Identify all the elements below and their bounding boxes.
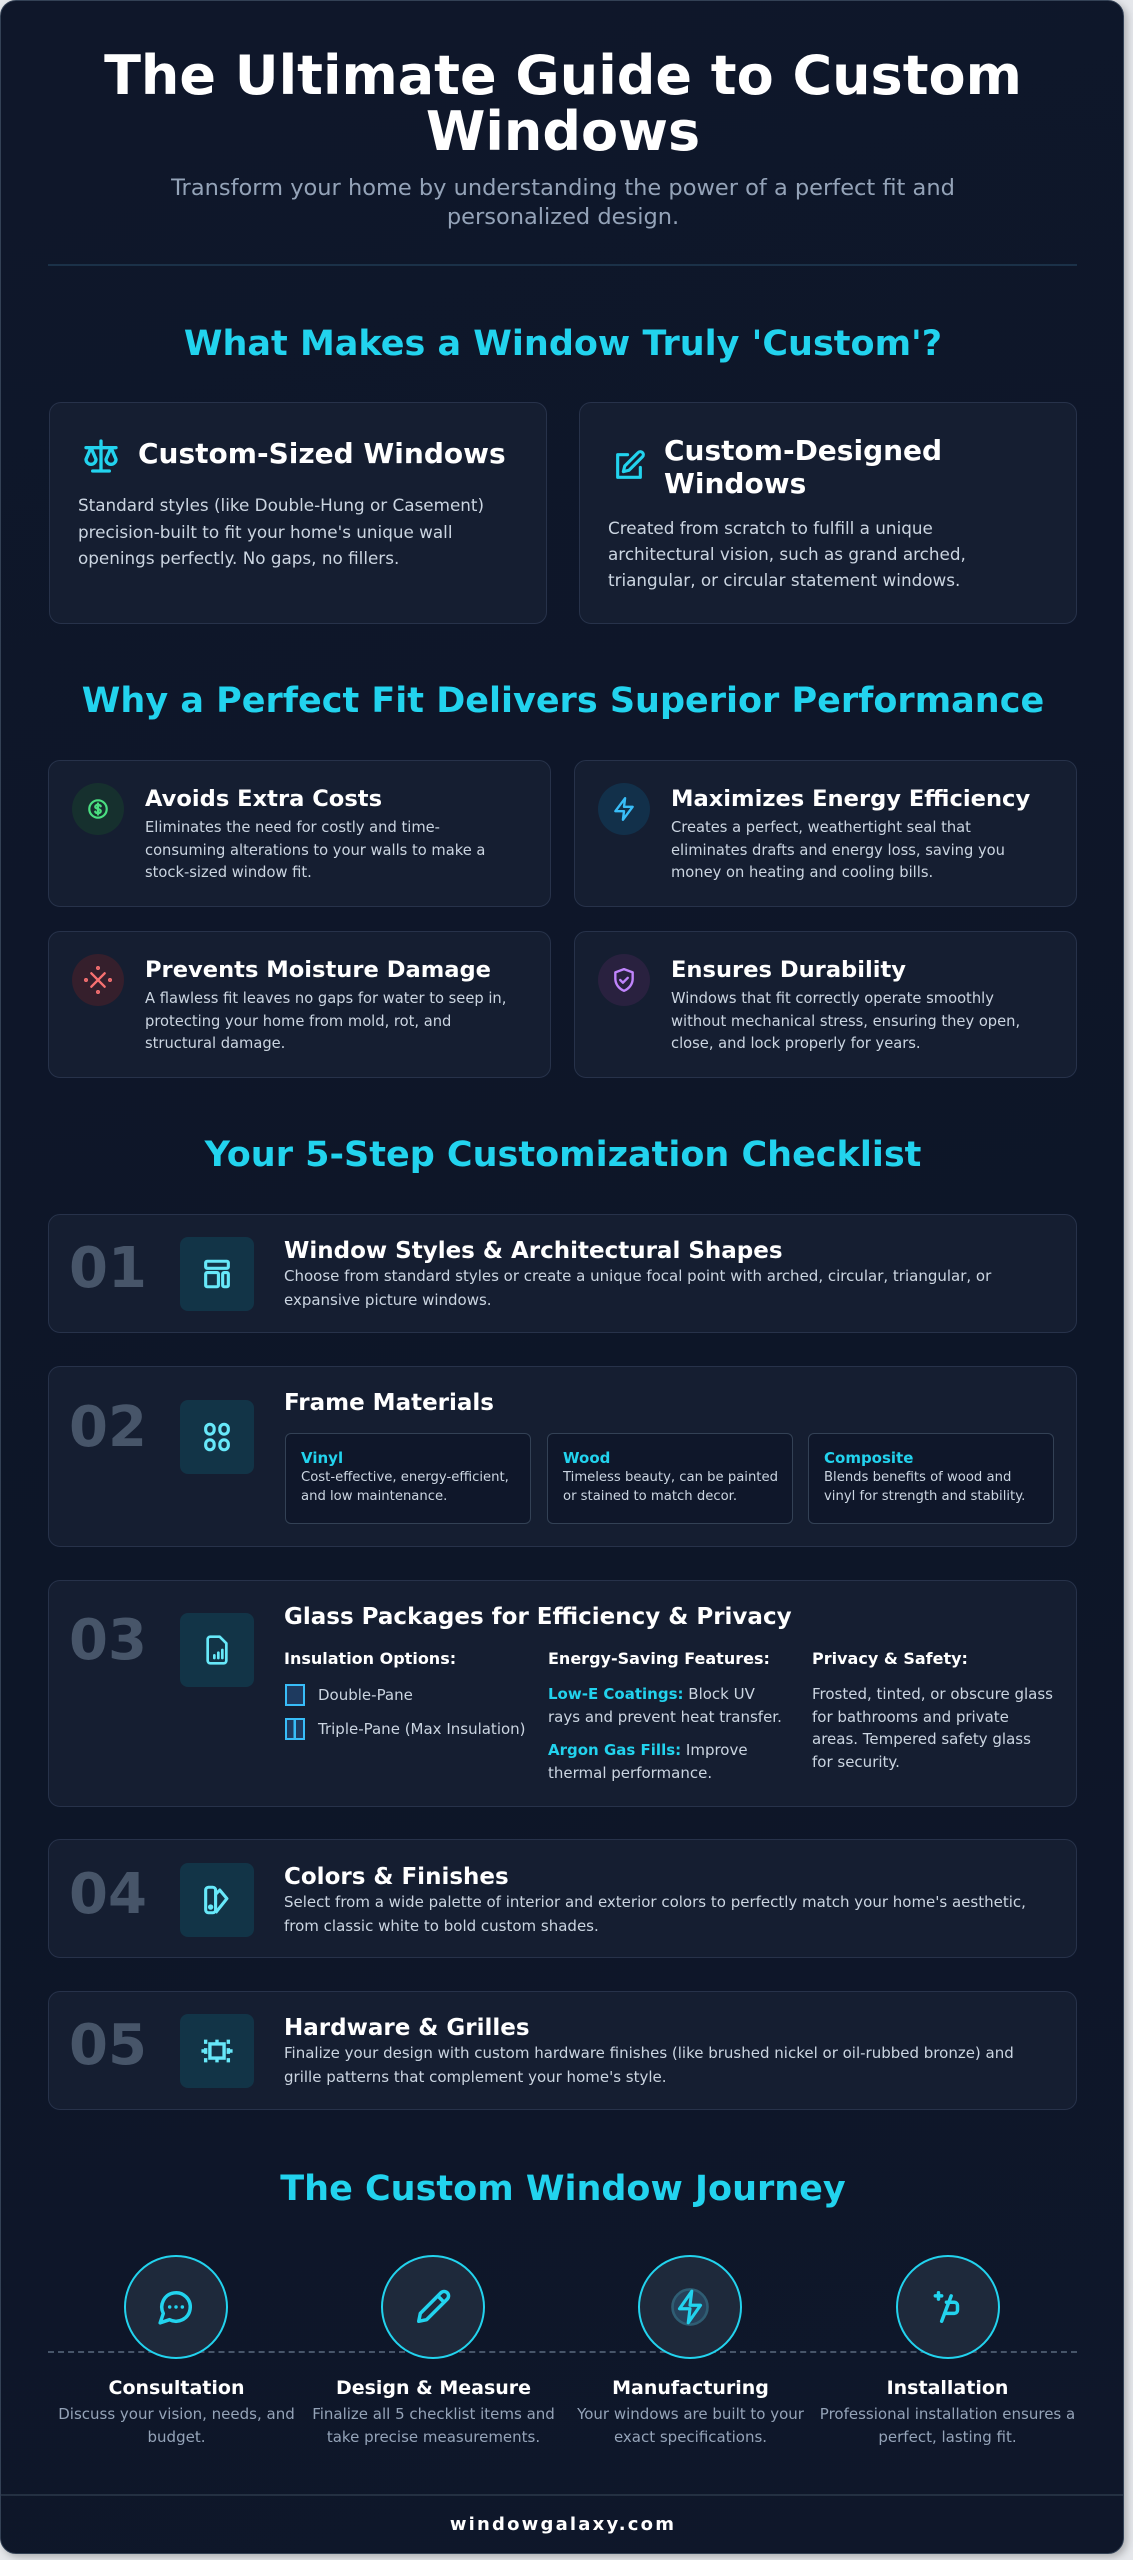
panel: energy efficiency: eliminates drafts and energy loss, saving you — [671, 842, 1005, 858]
card body — [608, 518, 966, 590]
text: expansive picture windows. — [284, 1290, 492, 1308]
text: Finalize your design with custom hardware finishes (like brushed nickel or oil-rubbed bronze) and — [284, 2044, 1014, 2062]
panel: avoids extra costs: stock-sized window fit. — [145, 864, 312, 881]
panel: durability: without mechanical stress, ensuring they open, — [671, 1012, 1020, 1030]
panel: step 01 — [48, 1214, 1077, 1333]
text: Hardware & Grilles — [284, 2015, 530, 2041]
card body: triangular, or circular statement windows. — [608, 570, 960, 590]
card body: precision-built to fit your home's unique wall — [78, 522, 452, 542]
material: wood: or stained to match decor. — [563, 1489, 737, 1504]
column: privacy: areas. Tempered safety glass — [812, 1730, 1031, 1748]
material: wood: Timeless beauty, can be painted — [563, 1470, 778, 1485]
panel: energy efficiency: Maximizes Energy Efficiency — [671, 786, 1030, 812]
column: energy: Low-E Coatings: Block UV — [548, 1685, 755, 1703]
step: manufacturing: Your windows are built to your — [577, 2405, 804, 2423]
panel: moisture: structural damage. — [145, 1035, 285, 1052]
panel: avoids extra costs: consuming alterations to your walls to make a — [145, 842, 485, 858]
title: Windows — [426, 100, 700, 163]
column: privacy: for security. — [812, 1752, 900, 1770]
panel: energy efficiency — [574, 760, 1077, 907]
text: Window Styles & Architectural Shapes — [284, 1238, 783, 1264]
column: insulation: Insulation Options: — [284, 1649, 456, 1668]
panel: durability: Ensures Durability — [671, 957, 906, 983]
text: 04 — [69, 1862, 147, 1927]
step: consultation: Consultation — [109, 2377, 244, 2399]
column: energy: Argon Gas Fills: Improve — [548, 1741, 748, 1759]
icon: sparkle x — [72, 954, 124, 1006]
text: Frame Materials — [284, 1390, 494, 1416]
step: design: Finalize all 5 checklist items and — [312, 2405, 555, 2423]
card title: Windows — [664, 467, 806, 500]
material: wood — [547, 1433, 793, 1524]
card title — [664, 434, 942, 500]
text: Glass Packages for Efficiency & Privacy — [284, 1604, 792, 1630]
column: privacy: Frosted, tinted, or obscure glass — [812, 1685, 1053, 1703]
column: energy: rays and prevent heat transfer. — [548, 1708, 782, 1726]
icon: file chart — [180, 1613, 254, 1687]
panel: energy efficiency: money on heating and cooling bills. — [671, 864, 933, 881]
icon: chip — [180, 2014, 254, 2088]
step: installation: Professional installation ensures a — [820, 2405, 1075, 2423]
step: consultation: Discuss your vision, needs, and — [58, 2405, 295, 2423]
panel: moisture: A flawless fit leaves no gaps for water to seep in, — [145, 990, 506, 1007]
panel: moisture: Prevents Moisture Damage — [145, 957, 491, 983]
panel: durability — [574, 931, 1077, 1078]
text: Select from a wide palette of interior and exterior colors to perfectly match your home's aesthetic, — [284, 1893, 1026, 1911]
material: vinyl: Vinyl — [301, 1449, 343, 1467]
panel: avoids extra costs — [48, 760, 551, 907]
card title: Custom-Designed — [664, 434, 942, 467]
material: wood: Wood — [563, 1449, 610, 1467]
material: vinyl — [285, 1433, 531, 1524]
card body: openings perfectly. No gaps, no fillers. — [78, 548, 399, 568]
panel: custom-designed — [579, 402, 1077, 624]
panel: moisture — [48, 931, 551, 1078]
material: composite: Blends benefits of wood and — [824, 1470, 1011, 1485]
footer: windowgalaxy.com — [450, 2514, 676, 2535]
column: energy — [548, 1649, 782, 1782]
column: energy: thermal performance. — [548, 1764, 712, 1782]
icon: edit — [616, 450, 645, 479]
panel: custom-sized — [49, 402, 547, 624]
card body: Standard styles (like Double-Hung or Casement) — [78, 495, 484, 515]
icon: dollar — [72, 783, 124, 835]
column: energy: Energy-Saving Features: — [548, 1649, 770, 1668]
step: consultation — [58, 2255, 295, 2446]
step: consultation: budget. — [148, 2428, 205, 2446]
material: vinyl: Cost-effective, energy-efficient, — [301, 1470, 509, 1485]
subtitle: Transform your home by understanding the power of a perfect fit and — [171, 175, 955, 201]
step: installation: perfect, lasting fit. — [878, 2428, 1017, 2446]
heading: journey: The Custom Window Journey — [280, 2169, 846, 2209]
column: privacy: for bathrooms and private — [812, 1708, 1009, 1726]
text: Double-Pane — [318, 1686, 413, 1704]
panel: step 03 — [48, 1580, 1077, 1807]
text: 02 — [69, 1395, 147, 1460]
step: design: take precise measurements. — [327, 2428, 540, 2446]
subtitle — [171, 175, 955, 230]
panel: step 05 — [48, 1991, 1077, 2110]
step: manufacturing: exact specifications. — [614, 2428, 767, 2446]
material: composite: vinyl for strength and stability. — [824, 1489, 1025, 1504]
text: 03 — [69, 1608, 147, 1673]
panel: moisture: protecting your home from mold, rot, and — [145, 1012, 451, 1030]
panel: step 02 — [48, 1366, 1077, 1547]
material: composite — [808, 1433, 1054, 1524]
card body — [78, 495, 484, 568]
panel: avoids extra costs: Avoids Extra Costs — [145, 786, 382, 812]
title — [104, 44, 1022, 163]
heading: what makes custom: What Makes a Window Truly 'Custom'? — [184, 324, 942, 364]
step: design — [312, 2255, 555, 2446]
column: privacy — [812, 1649, 1053, 1770]
step: installation: Installation — [887, 2377, 1008, 2399]
text: 05 — [69, 2013, 147, 2078]
panel: energy efficiency: Creates a perfect, weathertight seal that — [671, 819, 971, 836]
panel: step 04 — [48, 1839, 1077, 1958]
column: privacy: Privacy & Safety: — [812, 1649, 968, 1668]
text: Colors & Finishes — [284, 1864, 509, 1890]
icon: layout — [180, 1237, 254, 1311]
icon: swatch — [180, 1863, 254, 1937]
panel: avoids extra costs: Eliminates the need for costly and time- — [145, 819, 440, 836]
icon: scale — [84, 439, 118, 473]
column: insulation — [284, 1649, 526, 1740]
text: grille patterns that complement your home's style. — [284, 2068, 667, 2086]
card title: Custom-Sized Windows — [138, 437, 506, 470]
card body: Created from scratch to fulfill a unique — [608, 518, 933, 538]
text: Triple-Pane (Max Insulation) — [318, 1720, 526, 1738]
panel: durability: Windows that fit correctly operate smoothly — [671, 990, 994, 1007]
subtitle: personalized design. — [447, 204, 679, 230]
heading: perfect fit: Why a Perfect Fit Delivers Superior Performance — [82, 681, 1044, 721]
icon: bolt — [598, 783, 650, 835]
text: 01 — [69, 1236, 147, 1301]
title: The Ultimate Guide to Custom — [104, 44, 1022, 107]
icon: shield — [598, 954, 650, 1006]
text: from classic white to bold custom shades. — [284, 1916, 599, 1934]
material: vinyl: and low maintenance. — [301, 1489, 447, 1504]
step: manufacturing — [577, 2255, 804, 2446]
material: composite: Composite — [824, 1449, 913, 1467]
step: manufacturing: Manufacturing — [612, 2377, 769, 2399]
text: Choose from standard styles or create a unique focal point with arched, circular, triangular, or — [284, 1267, 991, 1285]
panel: durability: close, and lock properly for years. — [671, 1035, 921, 1052]
step: design: Design & Measure — [336, 2377, 531, 2399]
heading: checklist: Your 5-Step Customization Checklist — [205, 1135, 921, 1175]
step: installation — [820, 2255, 1075, 2446]
icon: grid — [180, 1400, 254, 1474]
card body: architectural vision, such as grand arched, — [608, 544, 966, 564]
